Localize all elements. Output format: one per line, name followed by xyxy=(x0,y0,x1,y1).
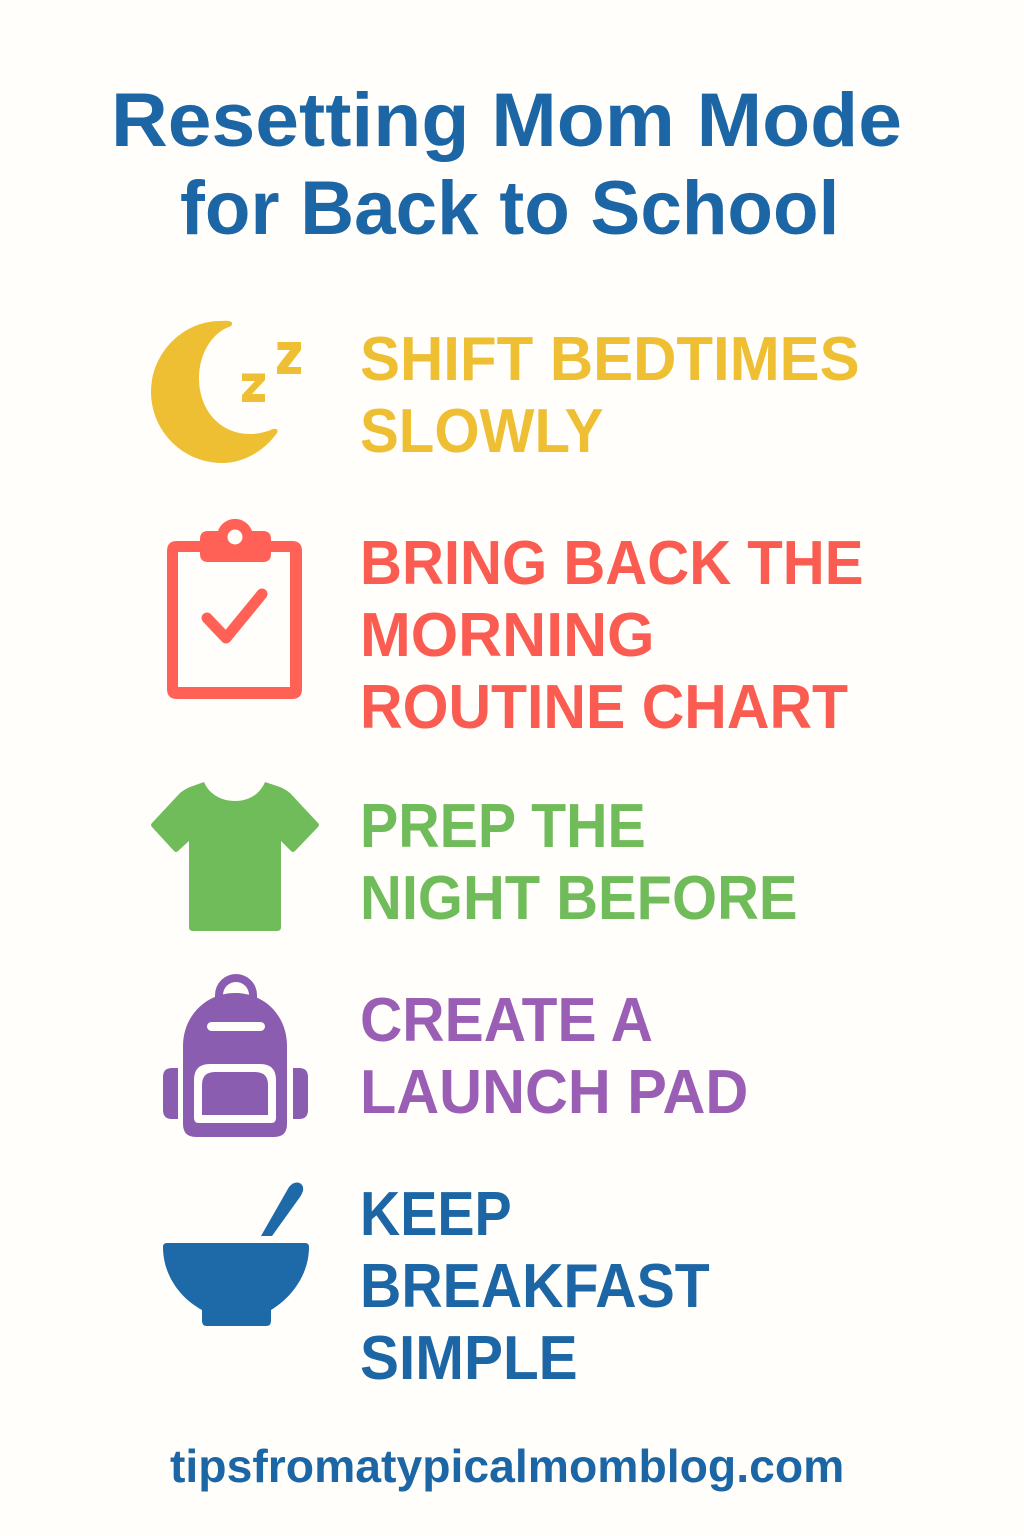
icon: t-shirt xyxy=(151,782,319,931)
title xyxy=(111,78,902,251)
text: launch pad xyxy=(360,986,748,1127)
icon: backpack xyxy=(163,974,308,1137)
title: for Back to School xyxy=(180,166,839,251)
text: shift bedtimes: SLOWLY xyxy=(360,397,603,466)
text: morning routine: ROUTINE CHART xyxy=(360,673,848,742)
title: Resetting Mom Mode xyxy=(111,78,902,163)
text: breakfast xyxy=(360,1180,710,1393)
text: prep: NIGHT BEFORE xyxy=(360,864,798,933)
icon: clipboard xyxy=(167,518,302,699)
text: prep: PREP THE xyxy=(360,792,646,861)
text: morning routine: MORNING xyxy=(360,601,655,670)
icon: bowl with spoon xyxy=(163,1182,309,1326)
text: breakfast: SIMPLE xyxy=(360,1324,578,1393)
text: breakfast: BREAKFAST xyxy=(360,1252,710,1321)
text: morning routine: BRING BACK THE xyxy=(360,529,863,598)
text: morning routine xyxy=(360,529,863,742)
text: breakfast: KEEP xyxy=(360,1180,512,1249)
text: shift bedtimes: SHIFT BEDTIMES xyxy=(360,325,860,394)
text: prep xyxy=(360,792,798,933)
text: shift bedtimes xyxy=(360,325,860,466)
text: launch pad: LAUNCH PAD xyxy=(360,1058,748,1127)
text: launch pad: CREATE A xyxy=(360,986,653,1055)
icon: moon with z's xyxy=(151,320,301,463)
footer url: tipsfromatypicalmomblog.com xyxy=(170,1440,844,1492)
